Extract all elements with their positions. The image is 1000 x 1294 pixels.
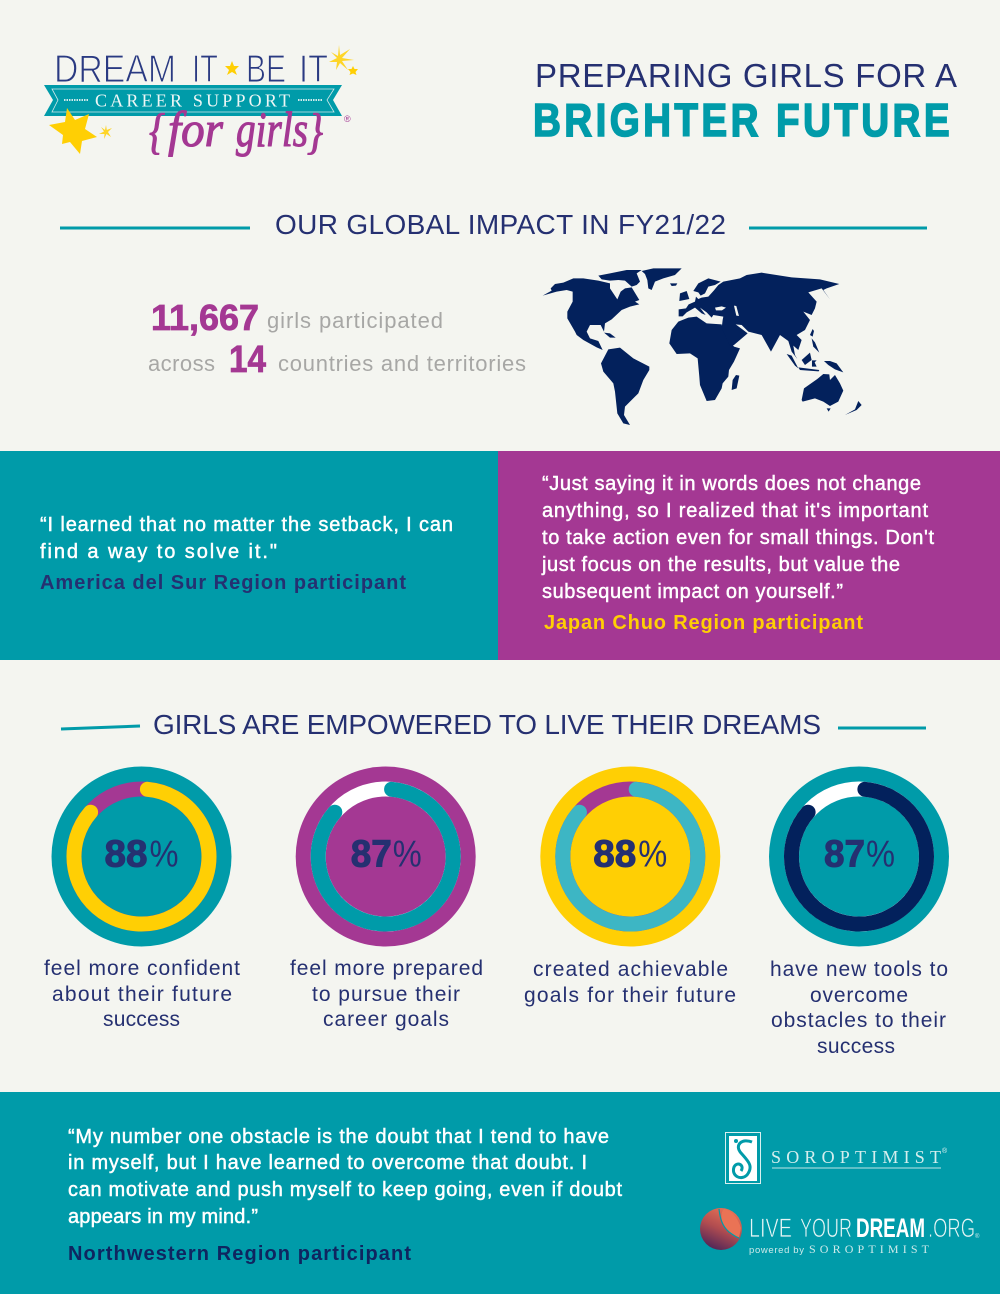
logo registered mark: ® (344, 114, 351, 124)
donut: 87% prepared: 87 (351, 834, 392, 876)
donut: 88% achievable goals: 88 (593, 834, 636, 876)
logo banner (44, 85, 342, 116)
logo wordmark: IT (192, 48, 218, 91)
logo: Live Your Dream: DREAM (856, 1213, 925, 1243)
caption: new tools: overcome (810, 984, 908, 1007)
caption: prepared (290, 957, 483, 1031)
quote attribution: America del Sur Region participant (40, 572, 406, 594)
logo script: for girls (149, 101, 323, 159)
logo: Live Your Dream: .ORG (928, 1213, 975, 1243)
logo wordmark (54, 48, 328, 91)
donut: 87% prepared: % (393, 834, 422, 874)
logo script: for girls: { (149, 103, 165, 159)
caption: confident (44, 957, 240, 1031)
logo: Soroptimist (726, 1132, 948, 1184)
caption: confident: about their future (52, 983, 232, 1006)
footer quote: in myself, but I have learned to overcome that doubt. I (68, 1152, 587, 1174)
footer quote: appears in my mind.” (68, 1206, 258, 1228)
footer quote: “My number one obstacle is the doubt that I tend to have (68, 1126, 609, 1148)
panel: purple quote (498, 451, 1000, 660)
logo wordmark: DREAM (54, 48, 176, 91)
caption: new tools (770, 958, 948, 1058)
footer attribution: Northwestern Region participant (68, 1243, 411, 1265)
donut: 88% confident: 88 (104, 834, 148, 876)
panel: footer (0, 1092, 1000, 1294)
statistics text (148, 297, 526, 381)
logo stars (49, 45, 358, 154)
logo: Dream It Be It (44, 45, 358, 159)
donut: 87% prepared (296, 766, 476, 946)
donut: 87% new tools: % (866, 834, 895, 874)
statistics text: girls participated (267, 308, 443, 333)
world map (543, 268, 862, 425)
panel: teal quote: find a way to solve it." (40, 541, 277, 563)
logo: Soroptimist: ® (942, 1147, 948, 1155)
donut: 88% confident: % (150, 834, 178, 874)
title line one: PREPARING GIRLS FOR A (535, 57, 957, 94)
heading: global impact: OUR GLOBAL IMPACT IN FY21/22 (275, 209, 726, 240)
caption: new tools: have new tools to (770, 958, 948, 981)
logo: Live Your Dream: LIVE (749, 1213, 792, 1243)
statistics text: 14 (229, 339, 266, 381)
heading: girls are empowered: GIRLS ARE EMPOWERED TO LIVE THEIR DREAMS (153, 709, 821, 740)
donut: 88% achievable goals: % (638, 834, 667, 874)
logo banner: CAREER SUPPORT (95, 90, 290, 110)
quote text: “Just saying it in words does not change (542, 473, 921, 495)
caption: new tools: success (817, 1035, 895, 1058)
logo wordmark: BE (246, 48, 286, 91)
caption: prepared: career goals (323, 1008, 449, 1031)
donut: 87% new tools (769, 766, 949, 946)
caption: achievable goals: goals for their future (524, 984, 736, 1007)
panel: teal quote (0, 451, 498, 660)
panel: purple quote: just focus on the results, but value the (541, 554, 900, 576)
logo: Live Your Dream: SOROPTIMIST (809, 1242, 930, 1256)
panel: purple quote: to take action even for small things. Don't (542, 527, 934, 549)
panel: purple quote: subsequent impact on yourself.” (542, 581, 843, 603)
logo: Live Your Dream: ® (975, 1233, 980, 1240)
caption: achievable goals (524, 958, 736, 1007)
logo wordmark: IT (299, 48, 328, 91)
panel: purple quote: anything, so I realized that it's important (542, 500, 928, 522)
title (533, 57, 957, 146)
caption: confident: feel more confident (44, 957, 240, 980)
caption: new tools: obstacles to their (771, 1009, 946, 1032)
footer quote: can motivate and push myself to keep going, even if doubt (68, 1179, 622, 1201)
logo script: for girls: for (168, 101, 224, 157)
donut: 87% new tools: 87 (824, 834, 865, 876)
donut: 88% confident (52, 766, 232, 946)
footer quote (68, 1126, 622, 1228)
logo: Live Your Dream (700, 1208, 980, 1256)
quote text: “I learned that no matter the setback, I can (40, 514, 453, 536)
logo script: for girls: girls (236, 101, 308, 157)
quote attribution: Japan Chuo Region participant (544, 612, 863, 634)
stat: girls participated: 11,667 (151, 297, 259, 338)
caption: confident: success (103, 1008, 180, 1031)
logo script: for girls: } (307, 103, 323, 159)
stat: countries: across (148, 351, 215, 376)
logo: Live Your Dream: powered by (749, 1245, 804, 1256)
logo: Live Your Dream: YOUR (800, 1213, 852, 1243)
caption: prepared: feel more prepared (290, 957, 483, 980)
logo: Soroptimist: SOROPTIMIST (771, 1147, 941, 1167)
caption: achievable goals: created achievable (533, 958, 728, 981)
statistics text: countries and territories (278, 351, 526, 376)
caption: prepared: to pursue their (312, 983, 460, 1006)
donut: 88% achievable goals (540, 766, 720, 946)
